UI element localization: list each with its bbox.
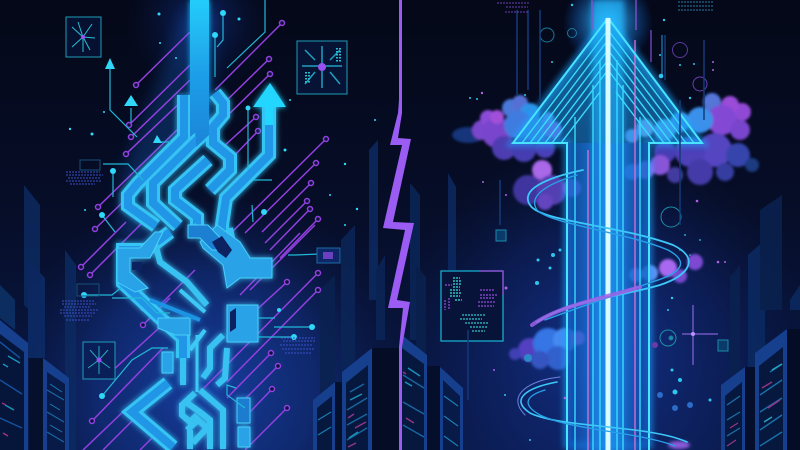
vertical data lines — [468, 10, 704, 400]
circuit blocks — [117, 225, 272, 447]
floating particles right — [469, 4, 712, 441]
server racks: right edge — [721, 329, 800, 450]
big neon arrow — [513, 0, 702, 450]
left trunk glow — [120, 10, 214, 240]
cloud: bottom — [668, 441, 690, 449]
big arrow glow — [513, 0, 702, 450]
floating particles purple — [481, 61, 726, 399]
lightning divider — [383, 0, 414, 450]
up arrow right — [253, 83, 286, 125]
server racks: centre right — [402, 335, 463, 450]
circuit maze: thick cyan traces — [117, 0, 286, 449]
cloud: right — [624, 93, 759, 185]
HUD data panel — [441, 271, 503, 341]
data text noise: left cluster — [60, 160, 315, 353]
gauge rings — [540, 28, 707, 346]
clouds behind arrow — [452, 93, 759, 449]
swirling light ribbons — [518, 170, 689, 446]
cloud: middle left — [513, 160, 581, 210]
cloud: swirl right — [629, 254, 703, 283]
small square glyphs — [496, 230, 728, 351]
right side ambient details — [468, 2, 728, 400]
chip icon: top right — [297, 41, 347, 94]
background towers — [0, 140, 800, 450]
server racks: left panel — [0, 320, 69, 450]
chip icon: lower left — [83, 342, 115, 379]
small cyan connector traces — [84, 0, 320, 408]
cloud: lower left — [509, 328, 585, 370]
small arrows and connector dots — [69, 10, 376, 399]
top data text — [497, 2, 713, 12]
sparkle — [682, 305, 718, 365]
central stem — [150, 290, 205, 392]
chip icon: right small — [317, 248, 340, 263]
server racks: centre left — [313, 348, 399, 450]
main trunk — [190, 0, 209, 147]
dark notches — [132, 236, 236, 332]
cloud: left — [452, 95, 562, 162]
purple diagonal traces with ring ends — [78, 20, 328, 450]
chip icon: top left — [66, 17, 101, 57]
